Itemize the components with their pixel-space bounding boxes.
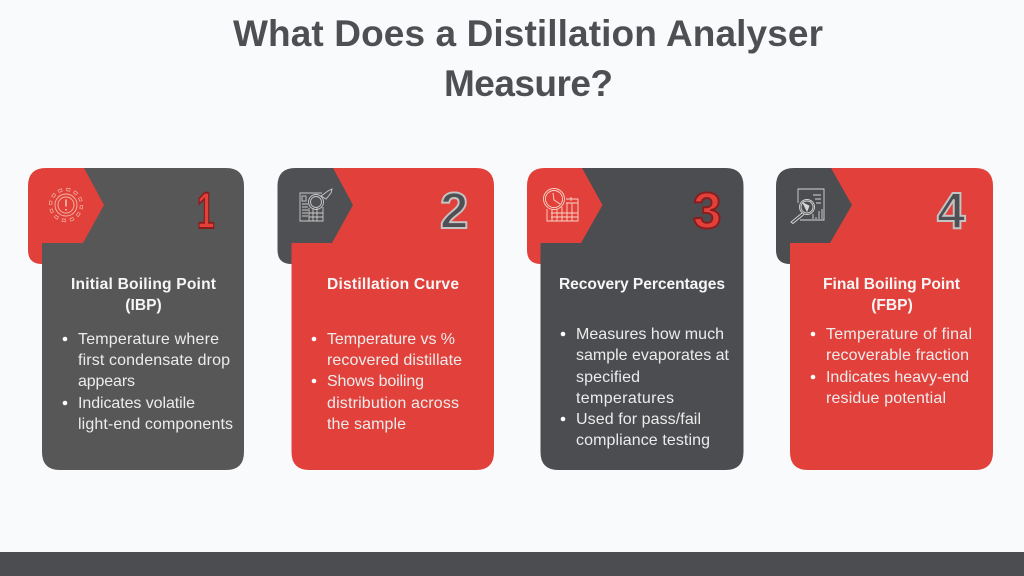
panel: initial boiling point <box>28 168 244 470</box>
bullet list: the sample <box>327 416 406 433</box>
icon: clock and calendar <box>544 188 578 221</box>
bullet list: Temperature of final <box>826 326 972 343</box>
heading <box>71 276 216 314</box>
bullet list: Temperature where <box>78 331 219 348</box>
heading <box>823 276 960 314</box>
bullet list <box>312 331 462 433</box>
heading: Recovery Percentages <box>559 276 725 293</box>
bullet list: Measures how much <box>576 326 724 343</box>
bullet list: Temperature vs % <box>327 331 455 348</box>
bullet list: sample evaporates at <box>576 347 730 364</box>
bullet list: light-end components <box>78 416 233 433</box>
bullet list: temperatures <box>576 390 674 407</box>
bullet list <box>811 326 972 407</box>
bullet list: recoverable fraction <box>826 347 969 364</box>
bullet list: first condensate drop <box>78 352 230 369</box>
panel: final boiling point <box>776 168 993 470</box>
footer bar <box>0 552 1024 576</box>
bullet list: Indicates volatile <box>78 395 195 412</box>
heading: (FBP) <box>871 297 913 314</box>
bullet list: distribution across <box>327 395 459 412</box>
heading: Final Boiling Point <box>823 276 960 293</box>
bullet list: residue potential <box>826 390 946 407</box>
bullet list: Indicates heavy-end <box>826 369 969 386</box>
number 1: 1 <box>197 182 215 239</box>
bullet list: recovered distillate <box>327 352 462 369</box>
panel: recovery percentages <box>527 168 744 470</box>
title <box>233 13 823 104</box>
heading: (IBP) <box>125 297 162 314</box>
bullet list: specified <box>576 369 640 386</box>
icon: gear with warning mark <box>50 190 82 220</box>
bullet list <box>63 331 233 433</box>
title: What Does a Distillation Analyser <box>233 13 823 54</box>
number 2: 2 <box>440 182 468 239</box>
bullet list: Shows boiling <box>327 373 424 390</box>
number 3: 3 <box>693 182 721 239</box>
bullet list: Used for pass/fail <box>576 411 701 428</box>
heading: Distillation Curve <box>327 276 459 293</box>
bullet list <box>561 326 730 449</box>
icon: document with magnifier <box>300 189 332 221</box>
panel: distillation curve <box>278 168 494 470</box>
icon: report with magnifier <box>791 189 824 224</box>
bullet list: compliance testing <box>576 432 710 449</box>
heading: Initial Boiling Point <box>71 276 216 293</box>
title: Measure? <box>444 63 613 104</box>
bullet list: appears <box>78 373 135 390</box>
number 4: 4 <box>937 182 966 239</box>
